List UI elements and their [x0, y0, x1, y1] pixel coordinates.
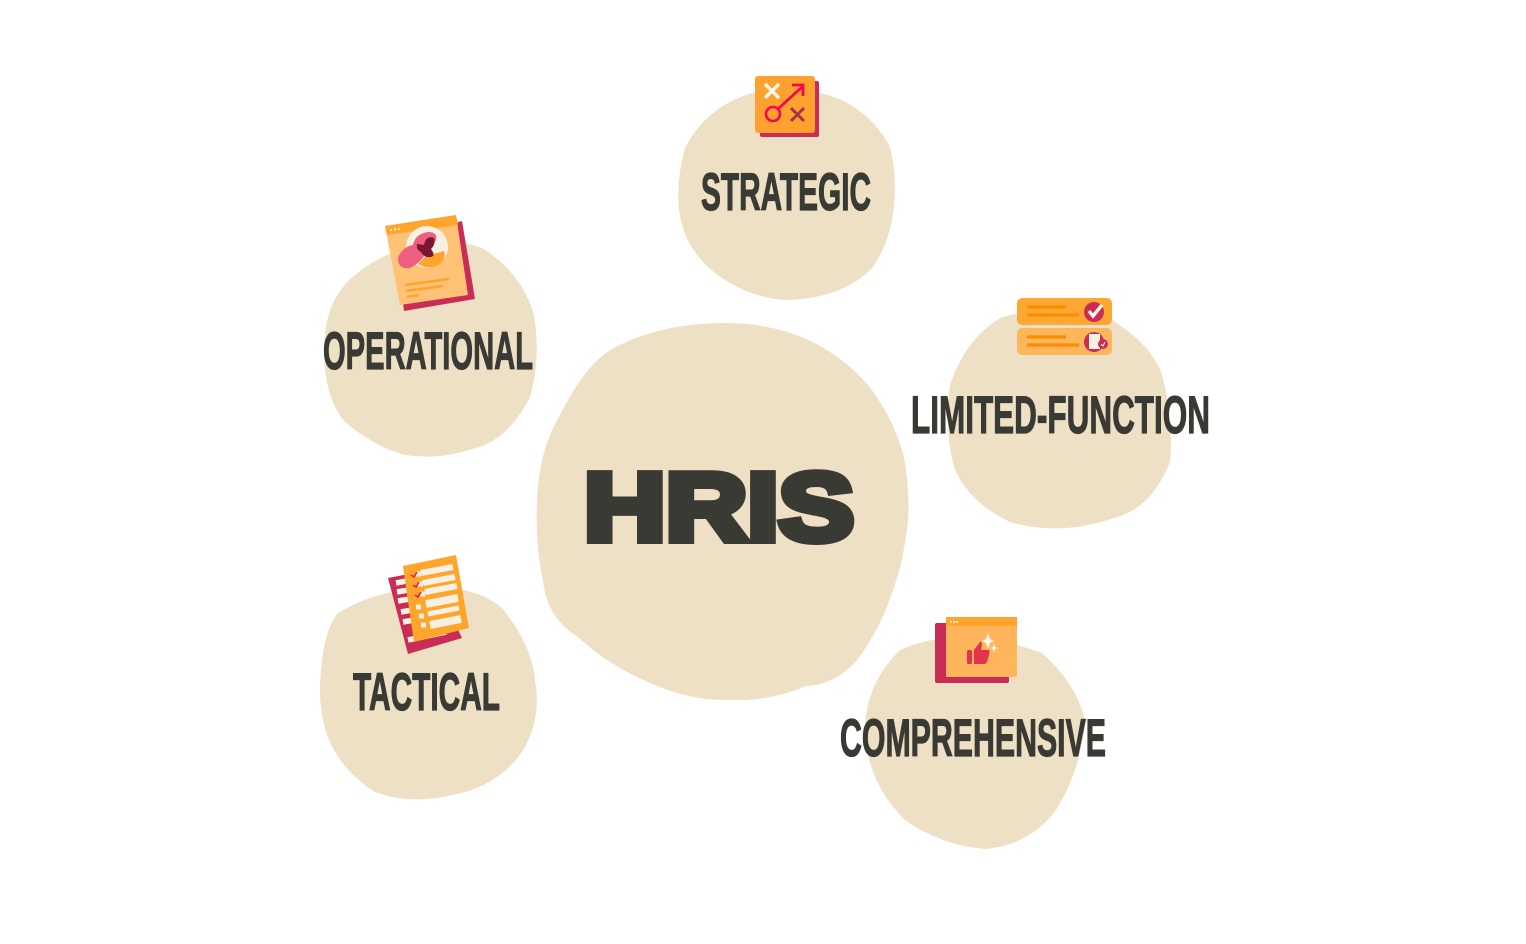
label: Comprehensive: COMPREHENSIVE — [840, 709, 1106, 768]
central node: HRIS — [537, 323, 908, 700]
node: Strategic — [678, 76, 895, 300]
icon: employee profile document — [385, 215, 475, 311]
icon: task checklists — [388, 555, 469, 654]
label: Operational: OPERATIONAL — [323, 322, 533, 381]
icon: strategy board — [755, 76, 819, 137]
icon: thumbs-up window — [935, 617, 1017, 683]
node: Limited-Function — [911, 298, 1210, 528]
node: Comprehensive — [840, 617, 1106, 849]
node: Operational — [323, 215, 537, 457]
label: Limited-Function: LIMITED-FUNCTION — [911, 386, 1210, 445]
icon: feature list — [1017, 298, 1112, 355]
label: Tactical: TACTICAL — [353, 663, 500, 722]
central node: HRIS: HRIS — [584, 454, 854, 561]
label: Strategic: STRATEGIC — [701, 163, 871, 222]
node: Tactical — [320, 555, 537, 799]
